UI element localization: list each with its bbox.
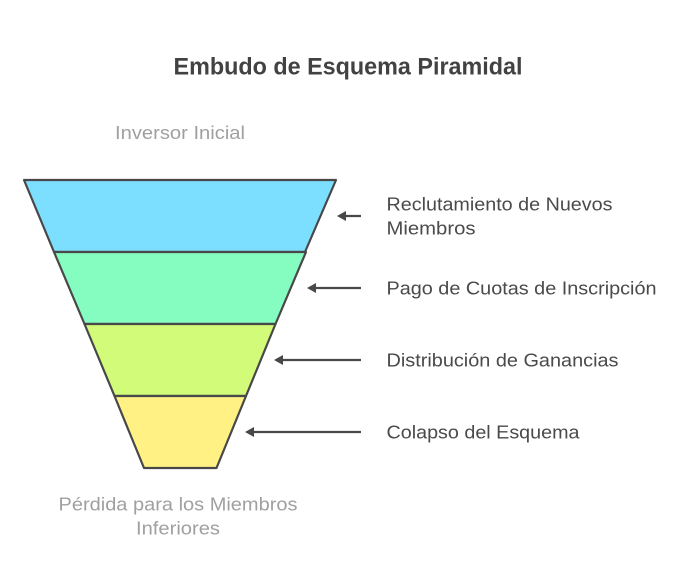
label: registration fees: Pago de Cuotas de Inscripción: [386, 278, 656, 298]
bottom label: loss for lower members: [58, 494, 298, 538]
arrow 4: [245, 427, 361, 437]
arrow 2: [307, 283, 361, 293]
funnel band 4: yellow: [114, 396, 246, 468]
label: recruiting new members: [386, 194, 612, 238]
arrow 1: [337, 211, 361, 221]
label: recruiting new members: Miembros: [386, 218, 476, 238]
label: scheme collapse: Colapso del Esquema: [386, 422, 580, 442]
funnel band 3: lime: [84, 324, 276, 396]
funnel band 2: green: [54, 252, 306, 324]
top label: initial investor: Inversor Inicial: [115, 122, 245, 143]
label: recruiting new members: Reclutamiento de Nuevos: [386, 194, 612, 214]
title: Embudo de Esquema Piramidal: [174, 54, 522, 80]
funnel: [24, 180, 336, 468]
label: profit distribution: Distribución de Ganancias: [386, 350, 618, 370]
funnel band 1: blue: [24, 180, 336, 252]
bottom label: loss for lower members: Inferiores: [136, 518, 220, 538]
arrow 3: [274, 355, 361, 365]
bottom label: loss for lower members: Pérdida para los Miembros: [58, 494, 298, 514]
